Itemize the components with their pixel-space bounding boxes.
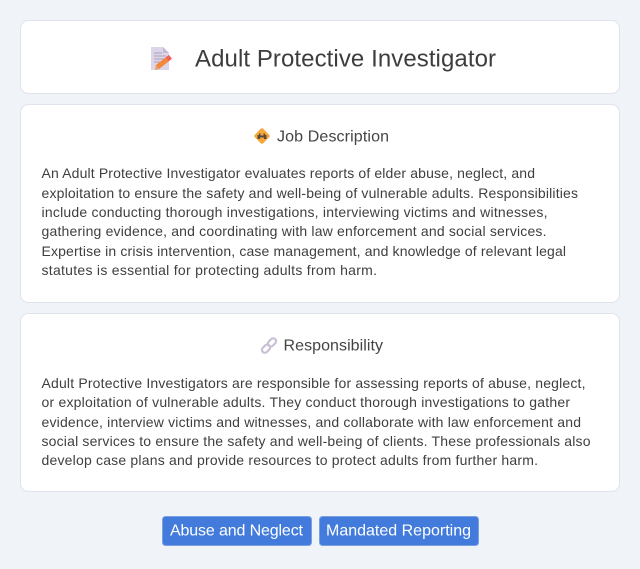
button: Mandated Reporting [320,516,478,546]
heading: job description: Job Description [277,128,389,146]
button: Abuse and Neglect: Abuse and Neglect [170,522,304,540]
text block: responsibility: Adult Protective Investigators are responsible for assessing reports of abuse, neglect, [42,375,586,391]
panel: job description [20,104,620,302]
text block: job description [42,165,578,278]
text block: job description: gathering evidence, and coordinating with law enforcement and social services. [42,223,546,239]
icon: diamond sign [254,128,270,144]
button: Mandated Reporting: Mandated Reporting [326,522,471,540]
title: Adult Protective Investigator [195,46,496,72]
text block: job description: include conducting thorough investigations, interviewing victims and witnesses, [42,204,548,220]
text block: responsibility [42,375,591,468]
icon: chain link [261,337,277,354]
panel: title card [20,20,620,94]
text block: job description: exploitation to ensure the safety and well-being of vulnerable adults. Responsibilities [42,185,578,201]
icon: document with pencil [151,47,170,70]
text block: responsibility: or exploitation of vulnerable adults. They conduct thorough investigations to gather [42,394,570,410]
panel: responsibility [20,314,620,492]
text block: job description: An Adult Protective Investigator evaluates reports of elder abuse, neglect, and [42,165,535,181]
text block: responsibility: social services to ensure the safety and well-being of clients. These professionals also [42,433,591,449]
text block: responsibility: evidence, interview victims and witnesses, and collaborate with law enforcement and [42,414,581,430]
button: Abuse and Neglect [162,516,312,546]
text block: job description: statutes is essential for protecting adults from harm. [42,262,377,278]
text block: responsibility: develop case plans and provide resources to protect adults from further harm. [42,452,538,468]
text block: job description: Expertise in crisis intervention, case management, and knowledge of relevant legal [42,243,566,259]
heading: responsibility: Responsibility [284,338,383,354]
